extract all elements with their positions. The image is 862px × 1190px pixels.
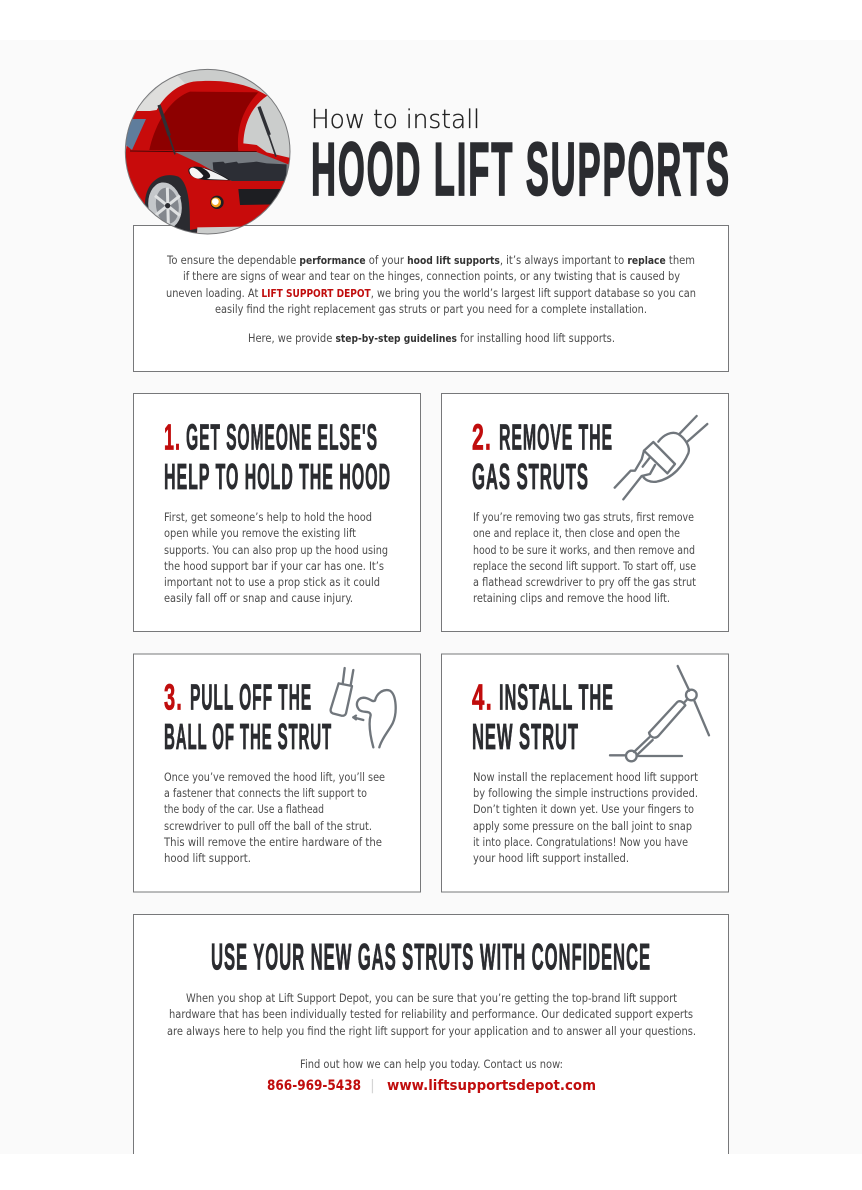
step 2 text: a flathead screwdriver to pry off the gas strut bbox=[473, 575, 696, 589]
icon: gas strut clip bbox=[615, 416, 707, 499]
step 2 text: If you’re removing two gas struts, first remove bbox=[473, 510, 694, 524]
intro text: Here, we provide step-by-step guidelines for installing hood lift supports. bbox=[248, 331, 615, 345]
panel: step 4 bbox=[442, 654, 728, 892]
panel: step 4: INSTALL THE bbox=[499, 676, 614, 718]
panel: step 2: REMOVE THE bbox=[499, 416, 613, 458]
step 1 text: supports. You can also prop up the hood using bbox=[164, 543, 388, 557]
step 1 text: open while you remove the existing lift bbox=[164, 526, 356, 540]
confidence text: Find out how we can help you today. Contact us now: bbox=[300, 1057, 563, 1071]
icon: installed strut bbox=[610, 666, 709, 761]
confidence text bbox=[167, 991, 696, 1071]
intro text: easily find the right replacement gas struts or part you need for a complete installation. bbox=[215, 302, 647, 316]
step 4 text: Don’t tighten it down yet. Use your fingers to bbox=[473, 802, 694, 816]
step 4 text bbox=[473, 770, 698, 865]
intro text: if there are signs of wear and tear on the hinges, connection points, or any twisting that is caused by bbox=[183, 269, 680, 283]
step 3 heading bbox=[164, 676, 332, 757]
step 2 heading bbox=[472, 416, 613, 497]
step 2 heading: GAS STRUTS bbox=[472, 456, 589, 497]
contact details: www.liftsupportsdepot.com bbox=[387, 1078, 596, 1094]
step 4 text: your hood lift support installed. bbox=[473, 851, 629, 865]
confidence text: When you shop at Lift Support Depot, you can be sure that you’re getting the top-brand lift support bbox=[186, 991, 677, 1005]
step 3 text: Once you’ve removed the hood lift, you’ll see bbox=[164, 770, 385, 784]
step 4 text: Now install the replacement hood lift support bbox=[473, 770, 698, 784]
step 2 text: replace the second lift support. To start off, use bbox=[473, 559, 696, 573]
panel: intro bbox=[134, 226, 728, 372]
step 3 text bbox=[163, 770, 385, 865]
step 2 heading: 2. bbox=[472, 416, 492, 458]
contact details: | bbox=[370, 1078, 375, 1094]
intro text: To ensure the dependable performance of your hood lift supports, it’s always important to replace them bbox=[166, 253, 695, 267]
title: How to install bbox=[311, 105, 480, 135]
step 4 heading: 4. bbox=[472, 676, 493, 718]
panel: step 3: BALL OF THE STRUT bbox=[164, 716, 332, 757]
intro text bbox=[166, 253, 696, 345]
step 2 text: hood to be sure it works, and then remove and bbox=[473, 543, 695, 557]
step 1 text bbox=[164, 510, 388, 605]
intro text: uneven loading. At LIFT SUPPORT DEPOT, we bring you the world’s largest lift support database so you can bbox=[166, 286, 696, 300]
contact details: 866-969-5438 bbox=[267, 1078, 361, 1094]
confidence text: are always here to help you find the right lift support for your application and to answer all your questions. bbox=[167, 1024, 696, 1038]
step 1 text: First, get someone’s help to hold the hood bbox=[164, 510, 372, 524]
step 1 heading bbox=[164, 416, 391, 497]
step 4 heading: NEW STRUT bbox=[472, 716, 579, 757]
step 3 text: screwdriver to pull off the ball of the strut. bbox=[164, 819, 372, 833]
step 4 text: by following the simple instructions provided. bbox=[473, 786, 698, 800]
panel: step 1: HELP TO HOLD THE HOOD bbox=[164, 456, 391, 497]
panel: step 1: GET SOMEONE ELSE'S bbox=[186, 416, 378, 458]
panel: step 3 bbox=[134, 654, 420, 892]
confidence text: hardware that has been individually tested for reliability and performance. Our dedicated support experts bbox=[169, 1007, 693, 1021]
contact details bbox=[267, 1078, 596, 1094]
step 1 text: important not to use a prop stick as it could bbox=[164, 575, 380, 589]
step 3 text: a fastener that connects the lift support to bbox=[164, 786, 367, 800]
step 2 text: retaining clips and remove the hood lift. bbox=[473, 591, 670, 605]
step 4 heading bbox=[472, 676, 614, 757]
icon: car with open hood bbox=[125, 69, 292, 242]
step 3 text: This will remove the entire hardware of the bbox=[163, 835, 382, 849]
step 4 text: apply some pressure on the ball joint to snap bbox=[473, 819, 692, 833]
step 3 text: hood lift support. bbox=[164, 851, 251, 865]
step 3 heading: 3. bbox=[164, 676, 183, 718]
step 3 text: the body of the car. Use a flathead bbox=[164, 802, 324, 816]
step 2 text: one and replace it, then close and open the bbox=[473, 526, 680, 540]
step 1 heading: 1. bbox=[164, 416, 181, 458]
step 3 heading: PULL OFF THE bbox=[190, 676, 312, 718]
panel: step 2 bbox=[442, 394, 728, 632]
panel: step 1 bbox=[134, 394, 420, 632]
step 2 text bbox=[473, 510, 696, 605]
panel: confidence bbox=[134, 914, 728, 1154]
title bbox=[311, 105, 731, 211]
step 1 text: easily fall off or snap and cause injury. bbox=[164, 591, 353, 605]
step 1 text: the hood support bar if your car has one. It’s bbox=[164, 559, 384, 573]
icon: strut ball and socket bbox=[331, 668, 396, 747]
step 4 text: it into place. Congratulations! Now you have bbox=[473, 835, 688, 849]
